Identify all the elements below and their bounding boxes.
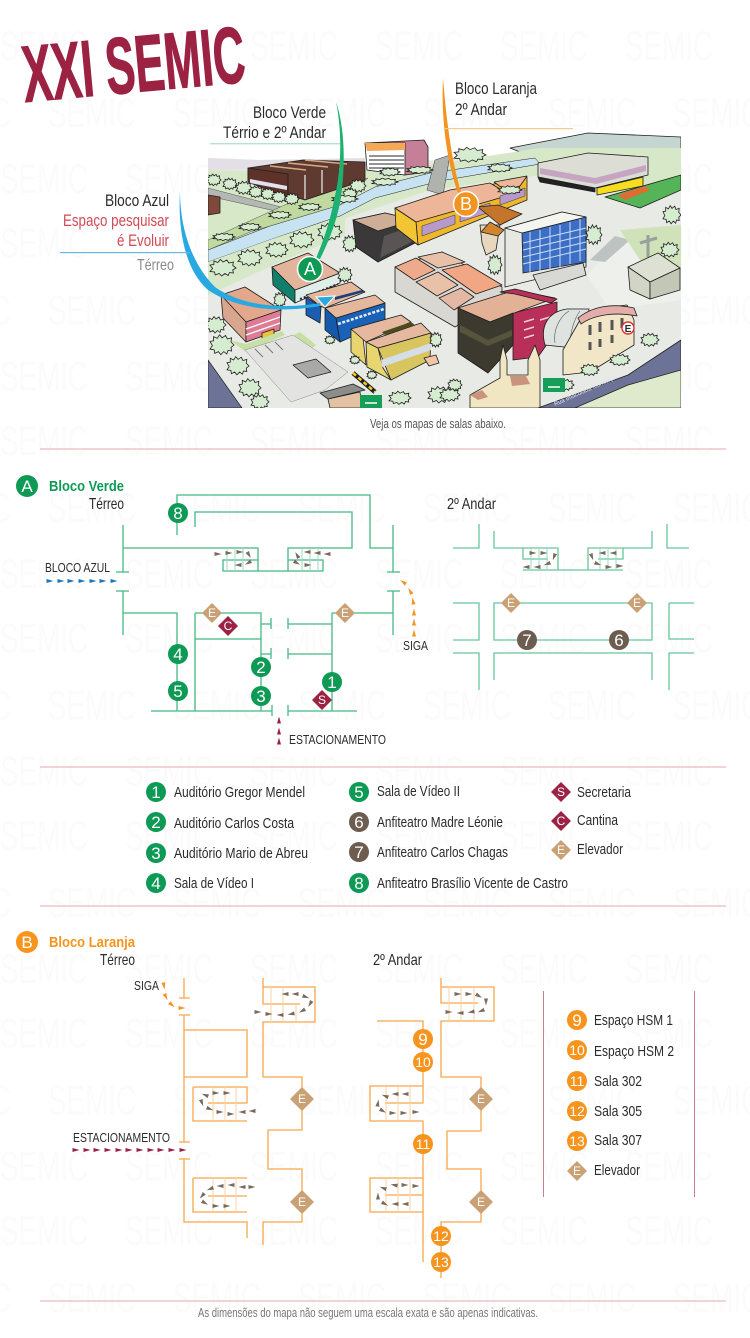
legend: bloco verde: Anfiteatro Madre Léonie <box>377 814 503 831</box>
dark building <box>353 213 415 262</box>
callout: bloco laranja <box>443 78 573 216</box>
room markers: 4 <box>173 645 183 664</box>
entrance: estacionamento <box>72 1130 186 1152</box>
legend: bloco verde: 7 <box>354 843 364 862</box>
entrance: siga <box>134 978 186 1010</box>
brick building <box>208 160 365 215</box>
room markers: E <box>633 596 641 610</box>
room markers: E <box>208 606 216 620</box>
legend: bloco laranja <box>543 991 695 1197</box>
stair arrows <box>198 992 313 1208</box>
panel: bloco laranja heading: B <box>21 933 33 952</box>
arena and sports field <box>498 153 681 224</box>
legend: bloco verde: 8 <box>354 874 364 893</box>
room markers: 7 <box>522 631 532 650</box>
legend: bloco verde: 3 <box>151 844 161 863</box>
callout: bloco laranja: Bloco Laranja <box>455 79 537 98</box>
legend: bloco verde: Anfiteatro Brasílio Vicente de Castro <box>377 875 568 892</box>
room markers <box>168 503 355 710</box>
room markers <box>501 593 647 650</box>
shell building <box>543 309 589 349</box>
dark glass and crimson building <box>458 289 557 373</box>
salmon roof blocks <box>395 252 502 327</box>
room markers: 13 <box>433 1254 449 1270</box>
floor plan: bloco laranja 2 andar: 2º Andar <box>373 952 423 969</box>
callout: bloco azul <box>60 191 335 309</box>
main road <box>538 340 681 408</box>
church <box>440 333 659 408</box>
legend: bloco verde: 1 <box>151 783 161 802</box>
legend: bloco laranja: 11 <box>570 1073 584 1089</box>
legend: bloco verde: Auditório Mario de Abreu <box>174 845 308 862</box>
legend: bloco laranja: Sala 307 <box>594 1132 642 1149</box>
callout: bloco verde: Térrio e 2º Andar <box>223 123 326 142</box>
tower block <box>488 212 602 290</box>
legend: bloco verde: Secretaria <box>577 784 632 801</box>
elevators: E <box>298 1195 306 1209</box>
legend: bloco verde: 4 <box>151 874 161 893</box>
yellow building <box>350 315 442 380</box>
legend: bloco verde: Sala de Vídeo I <box>174 875 254 892</box>
panel: bloco laranja heading: Térreo <box>100 952 135 969</box>
floor plan: bloco laranja terreo <box>72 978 315 1245</box>
room markers: 1 <box>327 673 337 692</box>
room markers: C <box>224 619 233 633</box>
panel: bloco verde heading <box>16 475 124 513</box>
callout: bloco verde <box>210 102 344 282</box>
legend: bloco laranja: 13 <box>569 1133 585 1149</box>
room markers: 9 <box>418 1030 428 1049</box>
floor plan: bloco verde 2 andar <box>447 496 694 690</box>
legend: bloco verde: Anfiteatro Carlos Chagas <box>377 844 508 861</box>
room markers: 11 <box>416 1136 430 1152</box>
callout: bloco verde: Bloco Verde <box>253 103 326 122</box>
callout: bloco azul: Bloco Azul <box>105 191 169 210</box>
caption: Veja os mapas de salas abaixo. <box>370 417 506 431</box>
elevators: E <box>298 1092 306 1106</box>
legend: bloco verde: S <box>557 785 565 799</box>
panel: bloco verde heading: Térreo <box>89 496 124 513</box>
entrance: bloco azul: BLOCO AZUL <box>45 560 110 575</box>
legend: bloco laranja: 9 <box>572 1011 582 1030</box>
callout: bloco laranja: B <box>460 194 472 214</box>
callout: bloco azul: Térreo <box>137 257 174 274</box>
trees: top left <box>207 174 366 205</box>
legend: bloco verde: Auditório Carlos Costa <box>174 815 295 832</box>
legend: bloco verde: Cantina <box>577 812 619 829</box>
legend: bloco verde <box>146 782 632 893</box>
legend: bloco verde: 5 <box>354 783 364 802</box>
room markers: S <box>318 693 326 707</box>
blue building <box>306 282 385 344</box>
legend: bloco verde: Elevador <box>577 841 623 858</box>
legend: bloco verde: 6 <box>354 813 364 832</box>
distant hill <box>510 132 681 152</box>
green banks and river <box>208 148 681 245</box>
entrance: estacionamento: ESTACIONAMENTO <box>289 732 386 747</box>
parking lot <box>206 316 348 409</box>
floor plan: bloco verde 2 andar: 2º Andar <box>447 496 497 513</box>
entrance: estacionamento: ESTACIONAMENTO <box>73 1130 170 1145</box>
guardhouse and barrier <box>320 373 462 408</box>
legend: bloco verde: Auditório Gregor Mendel <box>174 784 305 801</box>
legend: bloco laranja: Elevador <box>594 1162 640 1179</box>
callout: bloco azul: é Evoluir <box>117 231 169 250</box>
legend: bloco laranja: Espaço HSM 2 <box>594 1043 674 1060</box>
legend: bloco verde: Sala de Vídeo II <box>377 783 460 800</box>
room markers: 2 <box>256 658 266 677</box>
green block A building <box>272 253 352 307</box>
cube and cross plaza <box>590 225 681 300</box>
stair arrows <box>375 992 488 1207</box>
footer note: As dimensões do mapa não seguem uma escala exata e são apenas indicativas. <box>198 1306 538 1320</box>
legend: bloco verde: E <box>557 843 565 857</box>
entrance: bloco azul <box>45 560 118 583</box>
pink building <box>221 287 316 352</box>
room markers: 3 <box>256 687 266 706</box>
room markers: E <box>341 606 349 620</box>
legend: bloco laranja: 12 <box>569 1103 585 1119</box>
room markers: 10 <box>415 1054 431 1070</box>
room markers: 6 <box>614 631 624 650</box>
callout: bloco laranja: 2º Andar <box>455 100 507 119</box>
room markers: 8 <box>173 504 183 523</box>
room markers <box>413 1029 493 1272</box>
legend: bloco laranja: 10 <box>569 1042 585 1058</box>
pink and orange building <box>365 140 428 175</box>
panel: bloco laranja heading: Bloco Laranja <box>49 934 136 951</box>
colonial house <box>478 205 522 255</box>
entrance: siga <box>399 578 428 653</box>
historic building <box>563 305 637 375</box>
panel: bloco verde heading: Bloco Verde <box>49 478 124 495</box>
callout: bloco verde: A <box>304 259 316 279</box>
entrance: estacionamento <box>277 716 386 747</box>
floor plan: bloco laranja 2 andar <box>370 952 494 1278</box>
main road: Rua Imaculada Conceição <box>553 373 621 408</box>
entrance: siga: SIGA <box>403 638 428 653</box>
historic building: E <box>625 324 632 335</box>
legend: bloco verde: C <box>557 814 566 828</box>
callout: bloco azul: Espaço pesquisar <box>63 211 169 230</box>
legend: bloco verde: 2 <box>151 813 161 832</box>
entrance: siga: SIGA <box>134 978 159 993</box>
room markers: 5 <box>173 682 183 701</box>
room markers: E <box>477 1195 485 1209</box>
room markers: E <box>507 596 515 610</box>
legend: bloco laranja: Sala 302 <box>594 1073 642 1090</box>
stair arrows <box>214 550 330 567</box>
campus illustration <box>206 130 681 409</box>
hedge rows along the river <box>210 147 512 276</box>
floor plan: bloco verde terreo <box>45 495 428 747</box>
room markers: 12 <box>433 1228 449 1244</box>
room markers: E <box>477 1092 485 1106</box>
panel: bloco verde heading: A <box>21 477 33 496</box>
ground <box>208 158 681 408</box>
orange block B building <box>395 176 527 245</box>
panel: bloco laranja heading <box>16 931 136 969</box>
stair arrows <box>522 551 624 569</box>
legend: bloco laranja: Sala 305 <box>594 1103 642 1120</box>
legend: bloco laranja: Espaço HSM 1 <box>594 1012 673 1029</box>
legend: bloco laranja: E <box>573 1164 581 1178</box>
elevators <box>290 1087 314 1214</box>
bridge <box>427 155 450 195</box>
